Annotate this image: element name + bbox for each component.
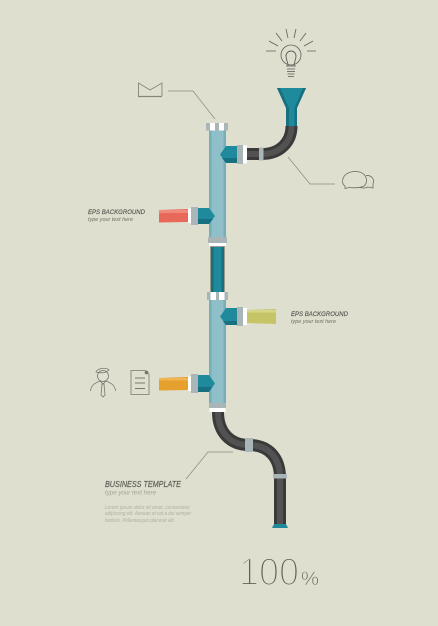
pipe: lower black curve bbox=[218, 412, 287, 525]
dark teal pipe segment bbox=[210, 246, 225, 293]
main vertical pipe lower bbox=[209, 300, 226, 404]
icon: businessman bbox=[90, 368, 116, 397]
leader line: speech bbox=[288, 157, 335, 184]
label: yellow outlet bbox=[291, 311, 348, 325]
coupling: middle bbox=[207, 292, 228, 300]
outlet: orange bbox=[159, 374, 215, 393]
leader line: business template bbox=[186, 452, 233, 479]
text block: business template: adipiscing elit. Aenean et est a dui semper bbox=[105, 511, 191, 517]
text block: business template bbox=[105, 479, 191, 524]
label: red outlet bbox=[88, 209, 145, 223]
funnel bbox=[277, 88, 306, 127]
connector: top right bbox=[220, 145, 247, 164]
icon: speech bubbles bbox=[342, 172, 374, 188]
label: yellow outlet: EPS BACKGROUND bbox=[291, 311, 348, 318]
leader line: envelope bbox=[168, 91, 215, 119]
icon: document bbox=[131, 370, 149, 394]
text block: business template: type your text here bbox=[105, 490, 156, 496]
text block: business template: facilisis. Pellentesque placerat elit. bbox=[105, 518, 175, 524]
coupling: upper bbox=[208, 237, 227, 246]
main vertical pipe upper bbox=[209, 130, 226, 238]
outlet: red bbox=[159, 207, 215, 225]
coupling: bottom bbox=[209, 403, 226, 412]
label: red outlet: type your text here bbox=[88, 217, 133, 223]
label: yellow outlet: type your text here bbox=[291, 319, 336, 325]
label: red outlet: EPS BACKGROUND bbox=[88, 209, 145, 216]
big number: 100%: % bbox=[301, 569, 319, 590]
icon: envelope bbox=[138, 83, 162, 96]
outlet: yellow bbox=[220, 307, 276, 326]
icon: light bulb bbox=[266, 29, 316, 76]
pipe foot bbox=[272, 524, 288, 528]
big number: 100%: 100 bbox=[239, 551, 299, 594]
top cap bbox=[206, 123, 228, 130]
text block: business template: BUSINESS TEMPLATE bbox=[105, 479, 181, 489]
text block: business template: Lorem ipsum dolor sit amet, consectetur bbox=[105, 505, 190, 511]
pipe: upper black curve bbox=[247, 126, 292, 160]
